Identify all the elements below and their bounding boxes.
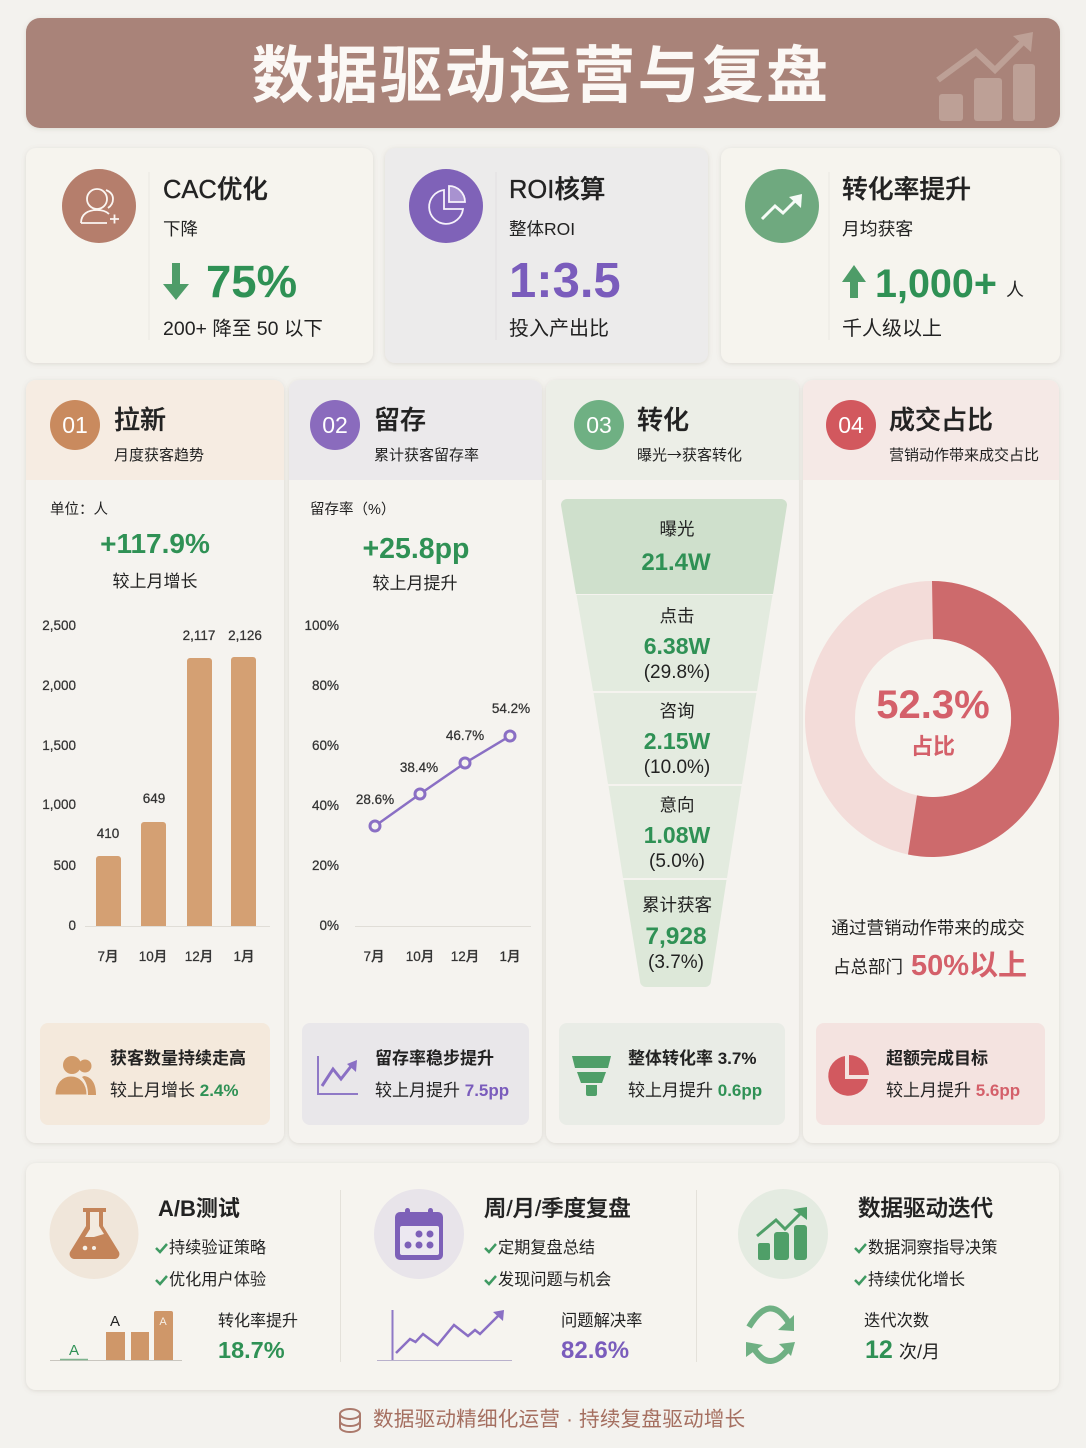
heading: 留存 (374, 405, 426, 435)
mini bar chart: A (110, 1313, 120, 1330)
subheading: 累计获客留存率 (374, 447, 479, 464)
section: A/B测试: 持续验证策略 (169, 1239, 266, 1257)
funnel chart: 6.38W (644, 633, 711, 659)
icon: growth bars (738, 1189, 828, 1279)
note: 投入产出比 (509, 317, 609, 340)
section: 数据驱动迭代: 数据驱动迭代 (858, 1196, 993, 1221)
icon: people (55, 1056, 96, 1095)
callout: 较上月增长 2.4% (110, 1081, 238, 1100)
mini bar chart: A (69, 1342, 79, 1359)
bar chart: 2,126 (228, 628, 262, 643)
section: 数据驱动迭代: 次/月 (899, 1342, 940, 1362)
line chart: 1月 (499, 949, 521, 964)
growth figure: +117.9% (100, 528, 210, 559)
title banner (26, 18, 1060, 128)
bar chart: 7月 (97, 949, 119, 964)
bar chart: 0 (68, 918, 76, 933)
heading: ROI核算 (509, 176, 605, 204)
icon: database (340, 1409, 360, 1432)
section: A/B测试: 18.7% (218, 1337, 285, 1363)
line chart: 38.4% (400, 760, 438, 775)
icon: refresh arrows (746, 1308, 795, 1361)
funnel chart: 7,928 (645, 923, 707, 950)
funnel chart: 咨询 (660, 701, 694, 721)
callout (559, 1023, 785, 1125)
subheading: 曝光→获客转化 (637, 444, 742, 465)
callout: 获客数量持续走高 (110, 1048, 246, 1068)
bar chart: 1,000 (42, 797, 76, 812)
subheading: 营销动作带来成交占比 (889, 446, 1039, 464)
footer: 数据驱动精细化运营 · 持续复盘驱动增长 (373, 1408, 745, 1431)
section: A/B测试: 转化率提升 (218, 1312, 298, 1330)
number badge: 01 (62, 412, 88, 438)
icon: down arrow (163, 263, 189, 300)
bar chart: 12月 (185, 949, 213, 964)
icon: pie chart (828, 1055, 869, 1096)
line chart: 54.2% (492, 701, 530, 716)
value: 1:3.5 (509, 254, 621, 308)
unit: 人 (1006, 280, 1024, 300)
funnel chart: 21.4W (641, 549, 711, 576)
value: 1,000+ (875, 262, 997, 306)
mini bar chart (50, 1311, 182, 1360)
number badge (574, 400, 624, 450)
subheading: 月度获客趋势 (114, 447, 204, 464)
unit: 留存率（%） (310, 501, 395, 518)
mini bar chart: A (159, 1316, 167, 1328)
growth figure: +25.8pp (363, 533, 469, 565)
line chart (304, 618, 531, 964)
label: 整体ROI (509, 219, 575, 239)
line chart: 60% (312, 738, 339, 753)
callout: 留存率稳步提升 (375, 1048, 494, 1068)
section: 周/月/季度复盘: 周/月/季度复盘 (484, 1196, 631, 1221)
heading: CAC优化 (163, 176, 268, 204)
icon: up arrow (842, 265, 866, 298)
line chart: 10月 (406, 949, 434, 964)
section: 数据驱动迭代: 12 (865, 1336, 893, 1364)
bar chart: 410 (97, 826, 119, 841)
section: A/B测试: A/B测试 (158, 1196, 240, 1221)
note: 千人级以上 (842, 317, 942, 340)
label: 月均获客 (842, 219, 913, 239)
section: 数据驱动迭代: 迭代次数 (864, 1312, 929, 1330)
panel: 02 留存 (289, 380, 542, 1143)
callout (302, 1023, 529, 1125)
bar chart: 500 (53, 858, 76, 873)
donut chart (805, 581, 1059, 857)
heading: 转化率提升 (842, 175, 971, 204)
number badge: 03 (586, 412, 612, 438)
bar chart (42, 618, 270, 964)
section: 周/月/季度复盘: 定期复盘总结 (498, 1238, 595, 1257)
callout (816, 1023, 1045, 1125)
highlight (833, 949, 1027, 982)
line chart: 40% (312, 798, 339, 813)
section: 周/月/季度复盘 (374, 1189, 642, 1364)
callout: 整体转化率 3.7% (628, 1048, 756, 1068)
bar chart: 649 (143, 791, 165, 806)
line chart: 0% (319, 918, 339, 933)
mini line chart (377, 1310, 512, 1360)
donut chart: 占比 (911, 734, 955, 759)
donut chart: 52.3% (876, 683, 990, 727)
highlight: 占总部门 (833, 957, 903, 977)
funnel chart: (3.7%) (648, 952, 704, 973)
funnel chart: 曝光 (660, 519, 694, 539)
callout: 较上月提升 0.6pp (628, 1081, 762, 1100)
icon: flask (50, 1189, 138, 1279)
panel: 01 拉新 (26, 380, 284, 1143)
funnel chart (561, 499, 787, 987)
line chart: 100% (304, 618, 339, 633)
line chart: 46.7% (446, 728, 484, 743)
bar chart: 1月 (233, 949, 255, 964)
panel: 03 转化 (546, 380, 799, 1143)
line chart: 20% (312, 858, 339, 873)
callout (40, 1023, 270, 1125)
icon: growth chart watermark (938, 32, 1035, 121)
callout: 较上月提升 5.6pp (886, 1081, 1020, 1100)
icon: add user (62, 169, 136, 243)
growth label: 较上月提升 (372, 574, 458, 593)
heading: 成交占比 (889, 405, 993, 435)
callout: 较上月提升 7.5pp (375, 1081, 509, 1100)
number badge (826, 400, 876, 450)
panel: bottom methods (26, 1163, 1059, 1390)
bar chart: 1,500 (42, 738, 76, 753)
funnel chart: (5.0%) (649, 851, 705, 872)
line chart: 28.6% (356, 792, 394, 807)
number badge: 04 (838, 412, 864, 438)
callout: 超额完成目标 (886, 1048, 988, 1068)
panel: 转化率提升 (721, 148, 1060, 363)
panel: 04 成交占比 (803, 380, 1059, 1143)
section: 周/月/季度复盘: 发现问题与机会 (498, 1271, 611, 1289)
number badge (50, 400, 100, 450)
funnel chart: 2.15W (644, 728, 711, 754)
funnel chart: (10.0%) (644, 757, 710, 778)
bar chart: 2,500 (42, 618, 76, 633)
bar chart: 10月 (139, 949, 167, 964)
funnel chart: 累计获客 (642, 895, 712, 915)
icon: calendar (374, 1189, 464, 1279)
line chart: 80% (312, 678, 339, 693)
title: 数据驱动运营与复盘 (252, 42, 830, 111)
line chart: 12月 (451, 949, 479, 964)
value: 75% (206, 256, 297, 307)
section: A/B测试 (50, 1189, 298, 1363)
funnel chart: 1.08W (644, 822, 711, 848)
icon: funnel (572, 1056, 611, 1096)
icon: rising line chart (318, 1056, 358, 1094)
unit: 单位：人 (50, 501, 108, 518)
icon: trend arrow (745, 169, 819, 243)
icon: pie chart (409, 169, 483, 243)
number badge (310, 400, 360, 450)
section: 周/月/季度复盘: 82.6% (561, 1337, 629, 1364)
highlight: 50%以上 (911, 949, 1027, 982)
funnel chart: (29.8%) (644, 662, 710, 683)
label: 下降 (163, 219, 198, 239)
section: 数据驱动迭代: 数据洞察指导决策 (868, 1239, 998, 1257)
funnel chart: 点击 (660, 606, 694, 626)
panel: ROI核算 (385, 148, 708, 363)
section: 数据驱动迭代 (738, 1189, 998, 1364)
heading: 转化 (637, 405, 689, 435)
number badge: 02 (322, 412, 348, 438)
section: A/B测试: 优化用户体验 (169, 1271, 266, 1289)
line chart: 7月 (363, 949, 385, 964)
funnel chart: 意向 (660, 795, 694, 815)
section: 周/月/季度复盘: 问题解决率 (561, 1312, 642, 1330)
note: 200+ 降至 50 以下 (163, 318, 323, 340)
panel: CAC优化 (26, 148, 373, 363)
growth label: 较上月增长 (112, 572, 198, 591)
description: 通过营销动作带来的成交 (831, 918, 1025, 938)
bar chart: 2,000 (42, 678, 76, 693)
heading: 拉新 (114, 405, 166, 435)
bar chart: 2,117 (183, 628, 215, 643)
section: 数据驱动迭代: 持续优化增长 (868, 1271, 965, 1289)
